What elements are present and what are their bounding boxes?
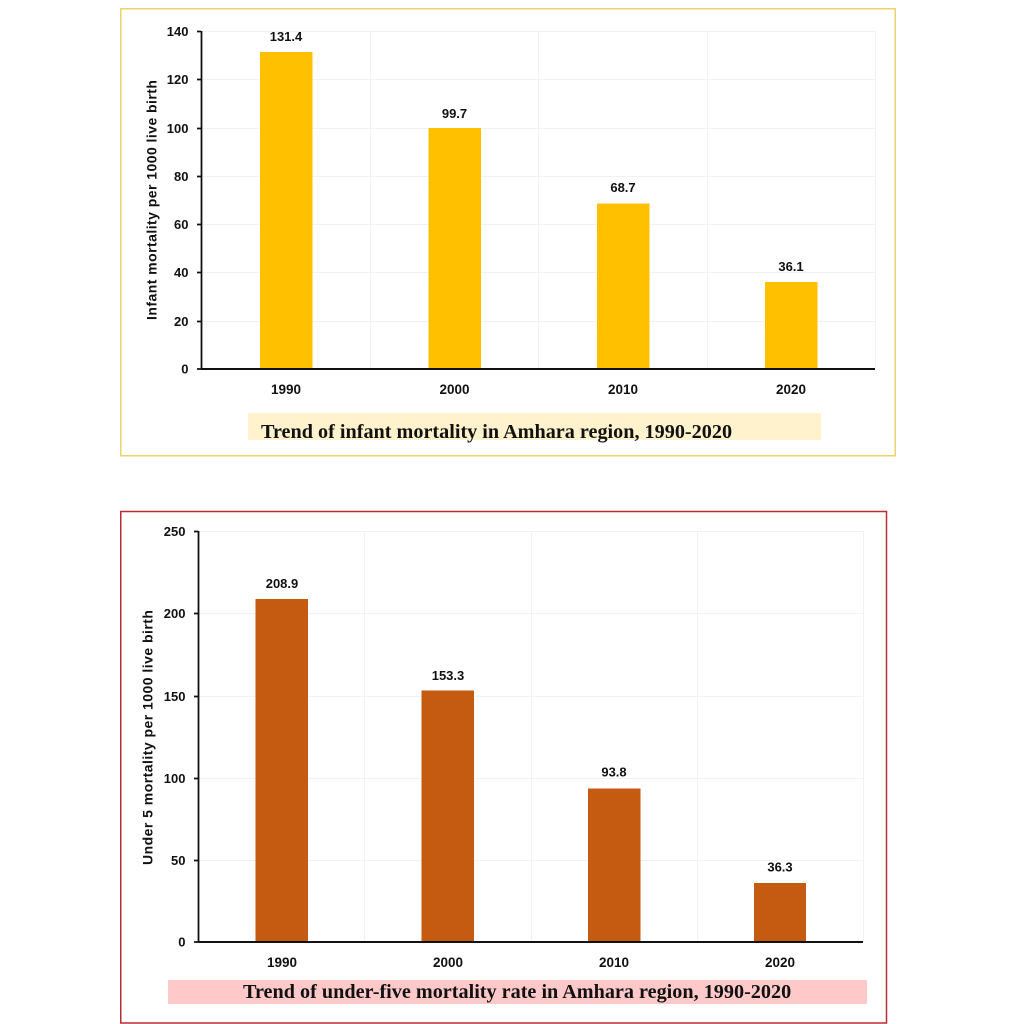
y axis: infant: 80 xyxy=(174,169,188,184)
value labels: infant xyxy=(270,29,804,274)
caption: infant mortality xyxy=(248,413,821,443)
caption: under-five mortality: Trend of under-five mortality rate in Amhara region, 1990-2020 xyxy=(243,981,791,1003)
y axis title: under five: Under 5 mortality per 1000 live birth xyxy=(140,610,156,865)
x axis: infant: 2020 xyxy=(776,382,806,397)
x axis: infant xyxy=(201,369,875,397)
y axis: under five: 100 xyxy=(164,771,186,786)
value labels: under five: 93.8 xyxy=(601,764,627,780)
bars: infant mortality xyxy=(260,52,818,369)
value labels: infant: 68.7 xyxy=(610,180,636,195)
panel: infant mortality chart xyxy=(121,9,895,456)
value labels: under five xyxy=(266,576,793,874)
y axis: infant xyxy=(167,24,202,376)
y axis: under five: 0 xyxy=(178,934,186,950)
y axis: under five xyxy=(164,524,198,950)
value labels: infant: 36.1 xyxy=(778,259,804,274)
y axis: under five: 50 xyxy=(171,853,186,868)
x axis: infant: 2000 xyxy=(439,382,470,397)
x axis: under five: 2020 xyxy=(765,955,795,970)
x axis: infant: 2010 xyxy=(608,382,638,397)
y axis: infant: 140 xyxy=(167,24,188,39)
value labels: under five: 208.9 xyxy=(266,576,298,591)
y axis: infant: 20 xyxy=(174,314,188,329)
y axis title: infant: Infant mortality per 1000 live birth xyxy=(144,80,160,320)
x axis: under five xyxy=(198,942,863,970)
y axis: under five: 200 xyxy=(164,606,186,621)
value labels: under five: 36.3 xyxy=(767,860,793,874)
x axis: infant: 1990 xyxy=(271,382,301,397)
panel: under-five mortality chart xyxy=(121,512,886,1023)
y axis: under five: 250 xyxy=(164,524,186,539)
y axis: infant: 100 xyxy=(167,121,188,136)
x axis: under five: 1990 xyxy=(267,955,297,970)
y axis: infant: 0 xyxy=(181,362,188,376)
x axis: under five: 2000 xyxy=(433,955,463,970)
y axis: infant: 120 xyxy=(167,72,188,87)
y axis: infant: 60 xyxy=(174,217,188,232)
value labels: infant: 99.7 xyxy=(442,106,467,121)
caption: infant mortality: Trend of infant mortality in Amhara region, 1990-2020 xyxy=(261,421,732,443)
y axis: under five: 150 xyxy=(164,689,186,704)
bars: under-five mortality xyxy=(256,599,806,942)
x axis: under five: 2010 xyxy=(599,955,629,970)
value labels: infant: 131.4 xyxy=(270,29,303,44)
y axis: infant: 40 xyxy=(174,265,188,280)
value labels: under five: 153.3 xyxy=(432,668,464,683)
